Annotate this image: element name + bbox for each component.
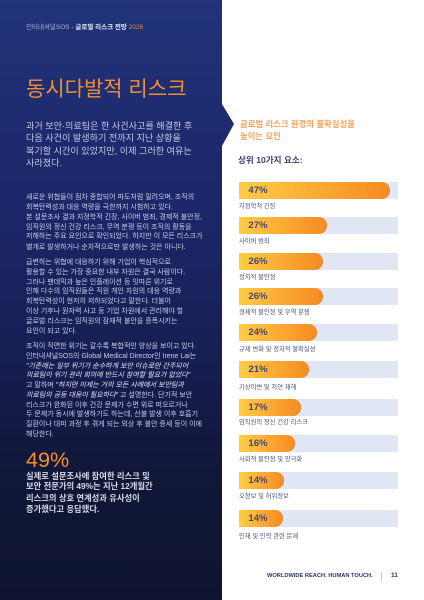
bar: 17%: 17%: [248, 402, 268, 412]
body paragraph 1: 임직원의 정신 건강 리스크, 무역 분쟁 등이 조직의 활동을: [26, 224, 192, 231]
bar: 14%: 14%: [248, 475, 268, 486]
body paragraph 2: 인해 다수의 임직원들은 직원 개인 차원의 대응 역량과: [26, 288, 181, 295]
bar: 24%: [239, 324, 398, 341]
body paragraph 3: 해당한다.: [26, 431, 54, 438]
callout: 49% statistic: 증가했다고 응답했다.: [26, 504, 99, 514]
body paragraph 1: 저해하는 주요 요인으로 확인되었다. 하지만 이 모든 리스크가: [26, 233, 203, 240]
callout: 49% statistic: 보안 전문가의 49%는 지난 12개월간: [26, 481, 153, 491]
bar chart: top 10 factors: 오정보 및 허위정보: [239, 493, 289, 500]
body paragraph 1: 새로운 위협들이 점차 종합되어 파도처럼 밀려오며, 조직의: [26, 194, 194, 201]
body paragraph 1: 본 설문조사 결과 지정학적 긴장, 사이버 범죄, 경제적 불안정,: [26, 214, 202, 221]
footer divider: [381, 572, 382, 581]
bar: 16%: 16%: [248, 438, 268, 449]
body paragraph 3: 두 문제가 동시에 발생하기도 하는데, 산불 발생 이후 호흡기: [26, 411, 198, 418]
body paragraph 3: 고 말하며 "하지만 이제는 거의 모든 사례에서 보안팀과: [26, 382, 184, 389]
body paragraph 3: [26, 342, 202, 438]
bar: 26%: 26%: [248, 256, 268, 266]
body paragraph 3: 의료팀이 위기 관리 회의에 반드시 참여할 필요가 없었다": [26, 372, 190, 379]
bar: 27%: [239, 217, 398, 234]
bar chart: top 10 factors: 인재 및 인력 관련 문제: [239, 533, 298, 540]
bar chart: top 10 factors: 규제 변화 및 정치적 불확실성: [239, 346, 316, 353]
title: 동시다발적 리스크: [26, 78, 186, 101]
body paragraph 2: 회복탄력성이 현저히 저하되었다고 말한다. 더불어: [26, 298, 171, 305]
bar: 24%: 24%: [248, 327, 268, 338]
bar chart: top 10 factors: 임직원의 정신 건강 리스크: [239, 419, 308, 426]
bar: 21%: 21%: [248, 364, 268, 375]
callout: 49% statistic: 리스크의 상호 연계성과 유사성이: [26, 493, 140, 503]
bar chart: top 10 factors: 기상이변 및 자연 재해: [239, 384, 296, 391]
body paragraph 3: 조직이 직면한 위기는 갈수록 복합적인 양상을 보이고 있다.: [26, 343, 196, 350]
bar: 47%: 47%: [248, 184, 268, 196]
bar: 16%: [239, 435, 398, 452]
footer tagline: WORLDWIDE REACH. HUMAN TOUCH.: [267, 573, 373, 579]
bar: 14%: [239, 510, 398, 527]
body paragraph 2: [26, 258, 185, 335]
body paragraph 3: "기존에는 일부 위기가 순수하게 보안 이슈로만 간주되어: [26, 363, 188, 370]
body paragraph 2: 급변하는 위협에 대응하기 위해 기업이 핵심적으로: [26, 259, 171, 266]
body paragraph 3: 의료팀의 공동 대응이 필요하다" 고 설명한다. 단기적 보안: [26, 392, 192, 399]
page number: 11: [391, 572, 398, 579]
bar chart: top 10 factors: 정치적 불안정: [239, 274, 276, 281]
callout: 49% statistic: 실제로 설문조사에 참여한 리스크 및: [26, 471, 150, 481]
body paragraph 1: 별개로 발생하거나 순차적으로만 발생하는 것은 아니다.: [26, 244, 186, 251]
body paragraph 3: 리스크가 완화된 이후 건강 문제가 수면 위로 떠오르거나: [26, 402, 188, 409]
body paragraph 2: 활용할 수 있는 가장 중요한 내부 자원은 결국 사람이다.: [26, 269, 185, 276]
bar chart: top 10 factors: 지정학적 긴장: [239, 203, 276, 210]
body paragraph 2: 그러나 팬데믹과 높은 인플레이션 등 잇따른 위기로: [26, 279, 173, 286]
subtitle: orange heading: 글로벌 리스크 환경의 불확실성을: [240, 119, 355, 129]
bar: 27%: 27%: [248, 220, 268, 231]
intro text: 다음 사건이 발생하기 전까지 지난 상황을: [26, 133, 181, 143]
body paragraph 1: [26, 193, 203, 251]
callout: 49% statistic: 49%: [26, 447, 69, 472]
subtitle: orange heading: [240, 119, 355, 141]
bar: 26%: [239, 252, 398, 270]
bar: 21%: [239, 361, 398, 378]
body paragraph 3: 인터내셔널SOS의 Global Medical Director인 Irene Lai는: [26, 353, 196, 360]
body paragraph 3: 질환이나 대피 과정 후 겪게 되는 외상 후 불안 증세 등이 이에: [26, 421, 202, 428]
subtitle: orange heading: 높이는 요인: [240, 131, 281, 141]
body paragraph 2: 글로벌 리스크는 임직원의 잠재적 불안을 증폭시키는: [26, 318, 177, 325]
bar: 17%: [239, 398, 398, 416]
intro text: [26, 121, 192, 168]
bar chart: top 10 factors: 사회적 불안정 및 양극화: [239, 456, 302, 463]
body paragraph 2: 이상 기후나 원자력 사고 등 기업 차원에서 관리해야 할: [26, 308, 183, 315]
bar: 14%: [239, 472, 398, 489]
bar: 26%: 26%: [248, 290, 268, 302]
bar chart: top 10 factors: 경제적 불안정 및 무역 분쟁: [239, 309, 310, 316]
bar: 14%: 14%: [248, 513, 268, 524]
intro text: 사라졌다.: [26, 158, 62, 168]
header line: 인터내셔널SOS - 글로벌 리스크 전망 2026: [26, 24, 143, 31]
chart heading: 상위 10가지 요소:: [238, 155, 303, 165]
intro text: 과거 보안·의료팀은 한 사건사고를 해결한 후: [26, 121, 192, 131]
bar chart: top 10 factors: 사이버 범죄: [239, 238, 270, 245]
bar: 26%: [239, 288, 398, 304]
callout: 49% statistic: [26, 447, 153, 514]
bar: 47%: [239, 182, 398, 198]
body paragraph 1: 회복탄력성과 대응 역량을 극한까지 시험하고 있다.: [26, 204, 173, 211]
body paragraph 2: 요인이 되고 있다.: [26, 328, 77, 335]
intro text: 복기할 시간이 있었지만, 이제 그러한 여유는: [26, 146, 192, 156]
